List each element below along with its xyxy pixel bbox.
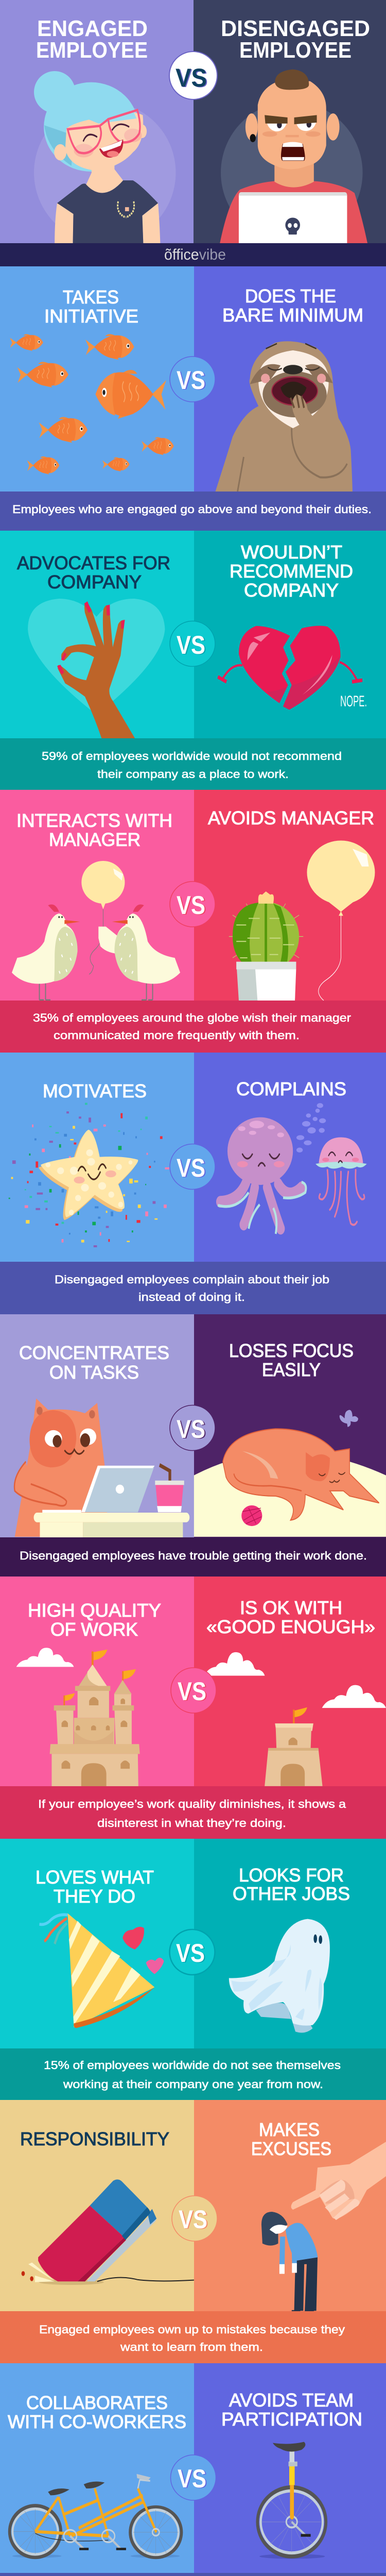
left background [0,1577,194,1786]
heading: avoids team participation [221,2389,362,2430]
illustration: unicycle [257,2442,326,2559]
heading: avoids manager: AVOIDS MANAGER [208,807,374,828]
left background [0,790,194,1001]
illustration: angry disengaged employee [220,70,367,250]
VS badge [170,621,215,667]
VS badge: VS [177,891,205,920]
panel: interacts vs avoids manager [0,790,386,1053]
VS badge [170,357,215,402]
heading: complains: COMPLAINS [236,1078,346,1099]
caption: 35% of employees around the globe wish their manager [33,1011,351,1024]
logo band: õfficevibe [164,246,226,263]
heading: disengaged employee: EMPLOYEE [239,38,352,63]
illustration: sleeping cat on a hill [194,1410,386,1537]
caption [0,2311,386,2363]
heading: avoids team participation: PARTICIPATION [221,2409,362,2430]
left background [0,1839,194,2048]
VS badge [171,1668,216,1713]
heading: disengaged employee: DISENGAGED [221,16,370,41]
caption: If your employee’s work quality diminishes, it shows a [38,1798,346,1810]
VS badge [169,52,217,99]
heading: concentrates on tasks: ON TASKS [49,1362,139,1383]
heading: advocates for company: COMPANY [47,571,142,592]
left background [0,1314,194,1537]
heading: does the bare minimum [222,285,363,326]
caption [0,1262,386,1314]
heading: makes excuses: EXCUSES [251,2138,331,2159]
VS badge: VS [178,1677,206,1706]
illustration: school of goldfish [10,334,174,474]
caption: Disengaged employees complain about their job [55,1273,329,1286]
panel: header engaged vs disengaged [0,0,386,266]
illustration: yawning sloth [216,341,353,492]
illustration: elaborate sand castle [16,1648,140,1787]
caption: disinterest in what they’re doing. [97,1817,286,1829]
left background [0,1053,194,1262]
left background [0,2363,194,2573]
VS badge: VS [177,631,205,659]
panel: responsibility vs makes excuses [0,2100,386,2363]
heading: avoids team participation: AVOIDS TEAM [229,2389,354,2411]
heading: engaged employee: ENGAGED [37,16,148,41]
panel: motivates vs complains [0,1053,386,1314]
caption: working at their company one year from now. [63,2078,323,2091]
caption: want to learn from them. [120,2341,263,2353]
heading: wouldn't recommend company: COMPANY [244,580,339,601]
header right background [194,0,386,243]
header left background [0,0,194,243]
right background [194,531,386,738]
VS badge: VS [177,1154,205,1182]
caption: 15% of employees worldwide do not see themselves [44,2059,341,2072]
right background [194,266,386,492]
caption: their company as a place to work. [97,768,289,781]
VS badge: VS [179,2205,207,2234]
heading: engaged employee [36,16,148,63]
illustration: hand pointing at ashamed worker [261,2142,386,2311]
VS badge: VS [177,1415,205,1444]
caption [0,2048,386,2100]
illustration: tandem bicycle [10,2474,182,2558]
caption [0,1537,386,1577]
illustration: OK hand on heart [28,599,165,740]
caption: Disengaged employees have trouble getting their work done. [20,1549,367,1562]
logo band [0,243,386,266]
caption: communicated more frequently with them. [54,1029,300,1042]
heading: loves what they do [36,1867,154,1907]
heading: collaborates with co-workers [8,2392,186,2432]
illustration: sad octopus and jellyfish [218,1103,367,1234]
panel: advocates vs wouldn't recommend [0,531,386,790]
heading: takes initiative: INITIATIVE [44,306,138,327]
caption [0,1001,386,1053]
caption: instead of doing it. [138,1291,245,1303]
panel: collaborates vs avoids team participation [0,2363,386,2576]
illustration: eraser correcting a line [22,2179,194,2285]
heading: loves what they do: LOVES WHAT [36,1867,154,1888]
heading: interacts with manager [16,810,172,850]
heading: loses focus easily [229,1340,354,1380]
heading: advocates for company [17,552,170,592]
heading: high quality of work: OF WORK [50,1619,138,1640]
left background [0,266,194,492]
right background [194,1839,386,2048]
right background [194,790,386,1001]
heading: motivates: MOTIVATES [43,1080,147,1101]
heading: loses focus easily: EASILY [262,1359,321,1380]
heading: makes excuses: MAKES [259,2119,320,2140]
VS badge [170,882,215,927]
illustration: tiny sand castle [204,1652,386,1786]
heading: disengaged employee [221,16,370,63]
illustration: broken heart saying nope [218,626,362,710]
right background [194,1053,386,1262]
heading: concentrates on tasks: CONCENTRATES [19,1342,169,1363]
illustration: smiling star with confetti [9,1103,169,1247]
caption: Employees who are engaged go above and beyond their duties. [12,503,372,516]
panel: takes initiative vs bare minimum [0,266,386,531]
heading: looks for other jobs: OTHER JOBS [233,1883,350,1904]
caption [0,738,386,790]
heading: does the bare minimum: DOES THE [245,285,336,307]
VS badge: VS [177,366,205,395]
heading: loses focus easily: LOSES FOCUS [229,1340,354,1361]
left background [0,531,194,738]
caption [0,1786,386,1839]
right background [194,1577,386,1786]
VS badge [170,1929,215,1975]
VS badge: VS [176,1939,205,1968]
heading: takes initiative: TAKES [63,286,119,308]
illustration: cactus and balloon [229,840,375,1001]
caption [0,492,386,531]
illustration: two chickens sharing a balloon [12,861,180,1000]
heading: engaged employee: EMPLOYEE [36,38,148,63]
left background [0,2100,194,2311]
VS badge [170,1405,215,1451]
heading: is ok with good enough: «GOOD ENOUGH» [206,1616,375,1637]
heading: high quality of work [28,1600,161,1640]
heading: interacts with manager: INTERACTS WITH [16,810,172,831]
heading: advocates for company: ADVOCATES FOR [17,552,170,573]
VS badge: VS [178,2464,206,2493]
right background [194,1314,386,1537]
right background [194,2100,386,2311]
panel: concentrates vs loses focus [0,1314,386,1577]
caption: 59% of employees worldwide would not recommend [42,750,342,762]
heading: collaborates with co-workers: WITH CO-WORKERS [8,2411,186,2432]
right background [194,2363,386,2573]
heading: is ok with good enough [206,1597,375,1637]
panel: loves what they do vs looks for other jobs [0,1839,386,2100]
heading: high quality of work: HIGH QUALITY [28,1600,161,1621]
heading: takes initiative [44,286,138,327]
caption: Engaged employees own up to mistakes because they [39,2323,345,2336]
heading: collaborates with co-workers: COLLABORATES [26,2392,168,2413]
VS badge: VS [176,63,207,92]
illustration: ghost flying away [229,1919,330,2032]
heading: looks for other jobs [233,1865,350,1904]
panel: high quality vs good enough [0,1577,386,1839]
VS badge [172,2196,217,2241]
caption [0,2573,386,2576]
heading: wouldn't recommend company [230,541,353,601]
heading: interacts with manager: MANAGER [49,829,141,850]
VS badge [171,2455,216,2500]
illustration: party hat with hearts [40,1913,164,2028]
heading: does the bare minimum: BARE MINIMUM [222,304,363,326]
heading: looks for other jobs: LOOKS FOR [239,1865,344,1886]
VS badge [170,1144,215,1189]
heading: responsibility: RESPONSIBILITY [20,2128,169,2149]
illustration: happy engaged employee [34,71,176,244]
illustration: cat working at laptop [14,1398,189,1537]
heading: concentrates on tasks [19,1342,169,1383]
heading: wouldn't recommend company: WOULDN’T [241,541,342,563]
heading: loves what they do: THEY DO [54,1886,135,1907]
heading: is ok with good enough: IS OK WITH [240,1597,342,1618]
heading: wouldn't recommend company: RECOMMEND [230,561,353,582]
heading: makes excuses [251,2119,331,2159]
